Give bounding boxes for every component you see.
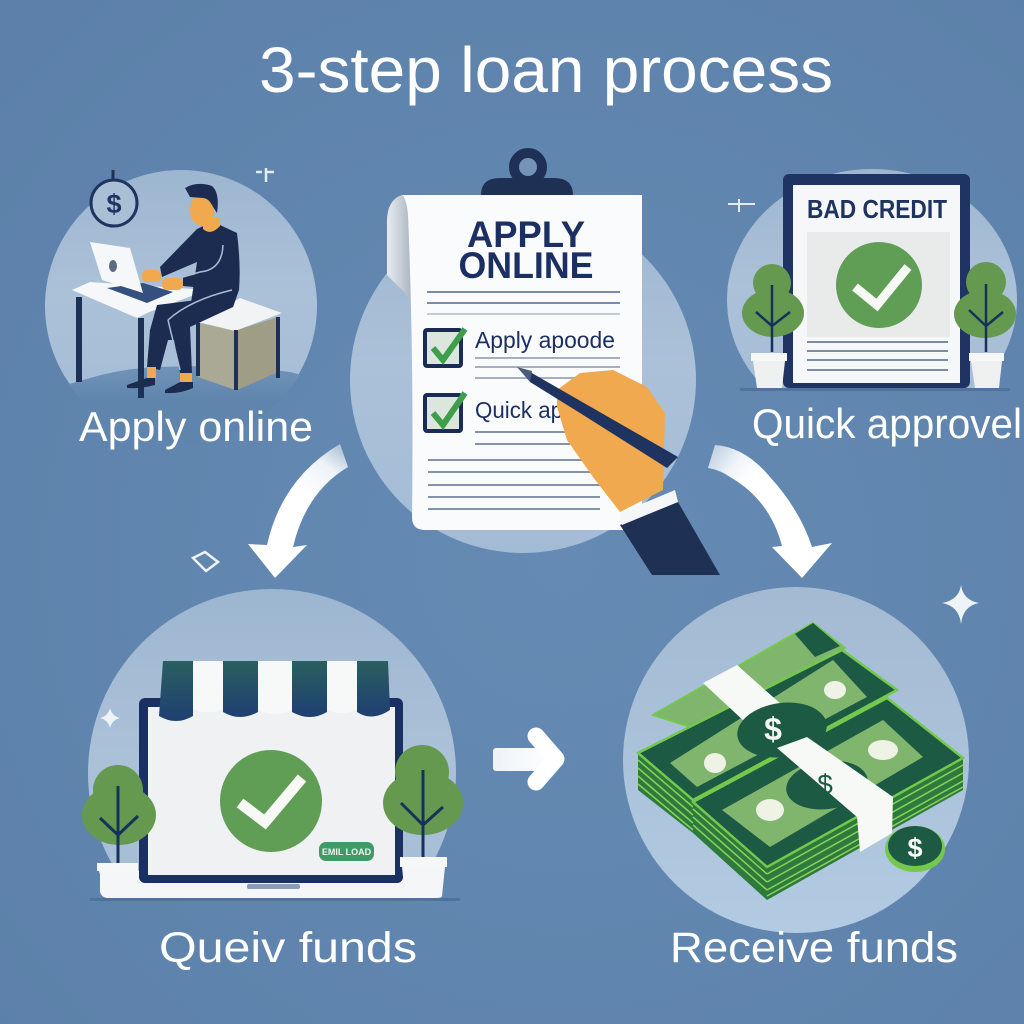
icon: small badge [193,552,218,571]
document: ONLINE [458,245,594,286]
icon: plant right [383,745,463,896]
floor line [740,388,1010,391]
icon: sparkle [256,168,274,182]
icon: plant right [954,262,1016,388]
arrow: down left [248,444,348,578]
panel: apply online [40,168,322,450]
icon: cash stacks: $ [907,833,923,863]
icon: storefront laptop [100,661,442,898]
title: 3-step loan process [259,34,833,106]
label: quick approval: Quick approvel [752,400,1022,447]
icon: plant left [742,264,804,388]
hand with pen [517,367,720,575]
laptop [90,242,173,303]
panel: quick approval [727,169,1022,447]
document: Quick ap [475,397,563,423]
panel circle [88,589,456,871]
panel: shop funds [82,552,463,972]
icon: dollar clock [91,170,137,226]
document: APPLY [467,214,585,255]
icon: cash stacks: $ [764,711,782,747]
panel circle [45,170,317,442]
stool [198,298,282,390]
floor shadow [69,366,300,442]
arrow: down right [708,445,832,578]
arrow: right [493,736,556,782]
icon: dollar clock: $ [106,189,122,219]
label: apply online: Apply online [79,403,313,450]
document: bad credit: BAD CREDIT [807,194,947,224]
panel: receive funds [623,587,969,972]
panel circle [350,207,696,553]
icon: plant left [82,765,156,898]
document: bad credit [783,174,970,388]
icon: sparkle [728,199,755,212]
label: receive funds: Receive funds [670,924,958,972]
panel circle [623,587,969,933]
icon: storefront laptop: EMIL LOAD [322,847,372,857]
document: Apply apoode [475,327,615,353]
icon: cash stacks [638,623,963,900]
panel circle [727,169,1017,388]
icon: cash stacks: $ [817,769,833,800]
floor shadow [90,898,460,901]
icon: sparkle right [942,585,979,624]
label: queiv funds: Queiv funds [159,924,417,972]
desk [72,282,207,398]
panel: centre document [350,153,720,575]
person [127,184,240,393]
icon: sparkle small [100,708,120,728]
document [387,195,642,530]
icon: clipboard clip [481,153,573,205]
